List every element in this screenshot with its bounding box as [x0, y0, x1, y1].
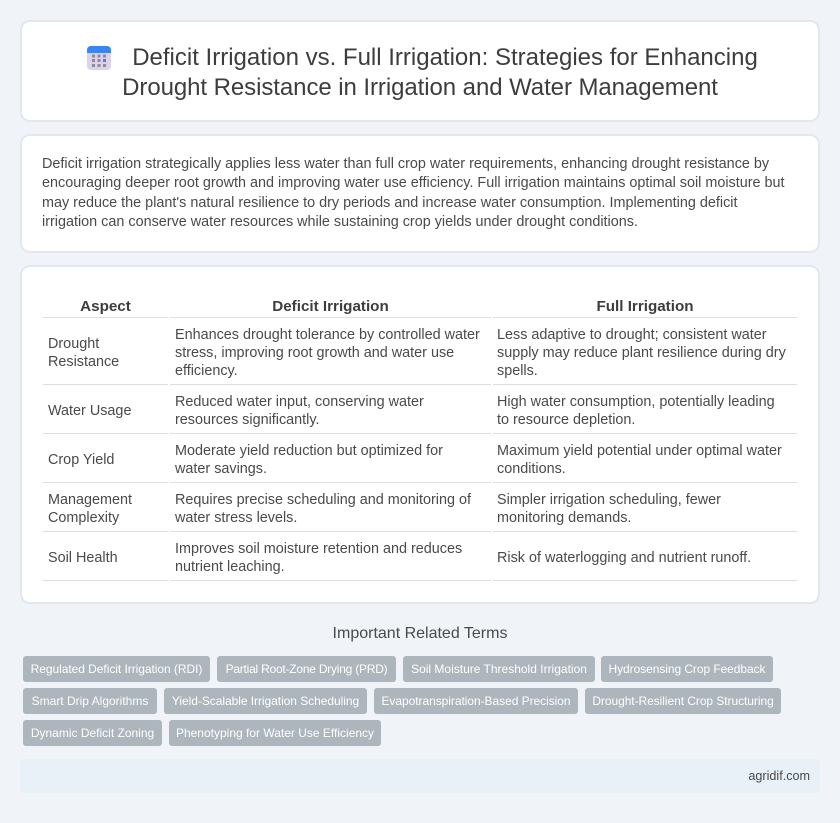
tag: Evapotranspiration-Based Precision [381, 694, 571, 708]
row: drought resistance: stress, improving root growth and water use [175, 345, 454, 361]
row: drought resistance: Resistance [48, 354, 119, 370]
tag [374, 688, 578, 714]
row: management complexity [48, 492, 721, 526]
title: Deficit Irrigation vs. Full Irrigation: Strategies for Enhancing [132, 44, 758, 71]
row: drought resistance [48, 327, 786, 379]
row: water usage [48, 394, 775, 428]
tag: Hydrosensing Crop Feedback [609, 662, 765, 676]
row: drought resistance: Enhances drought tolerance by controlled water [175, 327, 480, 343]
row: soil health: nutrient leaching. [175, 559, 285, 575]
text: introduction paragraph: may reduce the plant's natural resilience to dry periods and increase water consumption. Implementing deficit [42, 195, 737, 211]
row: drought resistance: spells. [497, 363, 538, 379]
text: introduction paragraph [42, 156, 785, 230]
row: drought resistance: Less adaptive to drought; consistent water [497, 327, 767, 343]
tag [23, 720, 162, 746]
row: water usage: Water Usage [48, 403, 131, 419]
row: crop yield [48, 443, 782, 477]
row: soil health [48, 541, 751, 575]
tag [585, 688, 781, 714]
title: Drought Resistance in Irrigation and Water Management [122, 74, 718, 101]
row: water usage: resources significantly. [175, 412, 320, 428]
row: management complexity: Complexity [48, 510, 119, 526]
footer [20, 759, 820, 793]
tag [217, 656, 396, 682]
tag: Regulated Deficit Irrigation (RDI) [31, 662, 202, 676]
row: management complexity: Simpler irrigation scheduling, fewer [497, 492, 721, 508]
row: drought resistance: Drought [48, 336, 99, 352]
panel: header [20, 20, 820, 122]
tag [169, 720, 381, 746]
tag: Dynamic Deficit Zoning [31, 726, 154, 740]
row: crop yield: water savings. [175, 461, 267, 477]
row: soil health: Improves soil moisture retention and reduces [175, 541, 462, 557]
row: management complexity: Management [48, 492, 132, 508]
tag [23, 656, 210, 682]
row: management complexity: water stress levels. [175, 510, 297, 526]
footer: agridif.com [748, 769, 810, 783]
row: crop yield: conditions. [497, 461, 566, 477]
row: crop yield: Maximum yield potential under optimal water [497, 443, 782, 459]
row: water usage: to resource depletion. [497, 412, 635, 428]
row: drought resistance: efficiency. [175, 363, 238, 379]
tag [164, 688, 367, 714]
row: management complexity: monitoring demands. [497, 510, 631, 526]
panel: comparison table [20, 265, 820, 604]
row: crop yield: Crop Yield [48, 452, 114, 468]
table header: full irrigation: Full Irrigation [596, 298, 694, 315]
tag [23, 688, 157, 714]
text: introduction paragraph: irrigation can conserve water resources while sustaining crop yields under drought conditions. [42, 214, 638, 230]
heading: important related terms: Important Related Terms [333, 625, 507, 642]
tag: Yield-Scalable Irrigation Scheduling [172, 694, 359, 708]
table header: aspect: Aspect [80, 298, 131, 315]
text: introduction paragraph: encouraging deeper root growth and improving water use efficiency. Full irrigation maintains optimal soil moisture but [42, 175, 785, 191]
tag [601, 656, 773, 682]
table header: deficit irrigation: Deficit Irrigation [272, 298, 389, 315]
panel: introduction [20, 134, 820, 253]
row: soil health: Risk of waterlogging and nutrient runoff. [497, 550, 751, 566]
row: crop yield: Moderate yield reduction but optimized for [175, 443, 443, 459]
row: drought resistance: supply may reduce plant resilience during dry [497, 345, 786, 361]
icon: calendar [87, 46, 111, 70]
tags: related terms [23, 656, 781, 746]
title [122, 44, 758, 101]
tag [403, 656, 595, 682]
row: water usage: High water consumption, potentially leading [497, 394, 775, 410]
text: introduction paragraph: Deficit irrigation strategically applies less water than full crop water requirements, enhancing drought resistance by [42, 156, 769, 172]
tag: Smart Drip Algorithms [32, 694, 148, 708]
tag: Soil Moisture Threshold Irrigation [411, 662, 587, 676]
row: water usage: Reduced water input, conserving water [175, 394, 424, 410]
row: management complexity: Requires precise scheduling and monitoring of [175, 492, 471, 508]
tag: Phenotyping for Water Use Efficiency [176, 726, 374, 740]
tag: Partial Root-Zone Drying (PRD) [226, 662, 387, 676]
tag: Drought-Resilient Crop Structuring [592, 694, 774, 708]
row: soil health: Soil Health [48, 550, 118, 566]
